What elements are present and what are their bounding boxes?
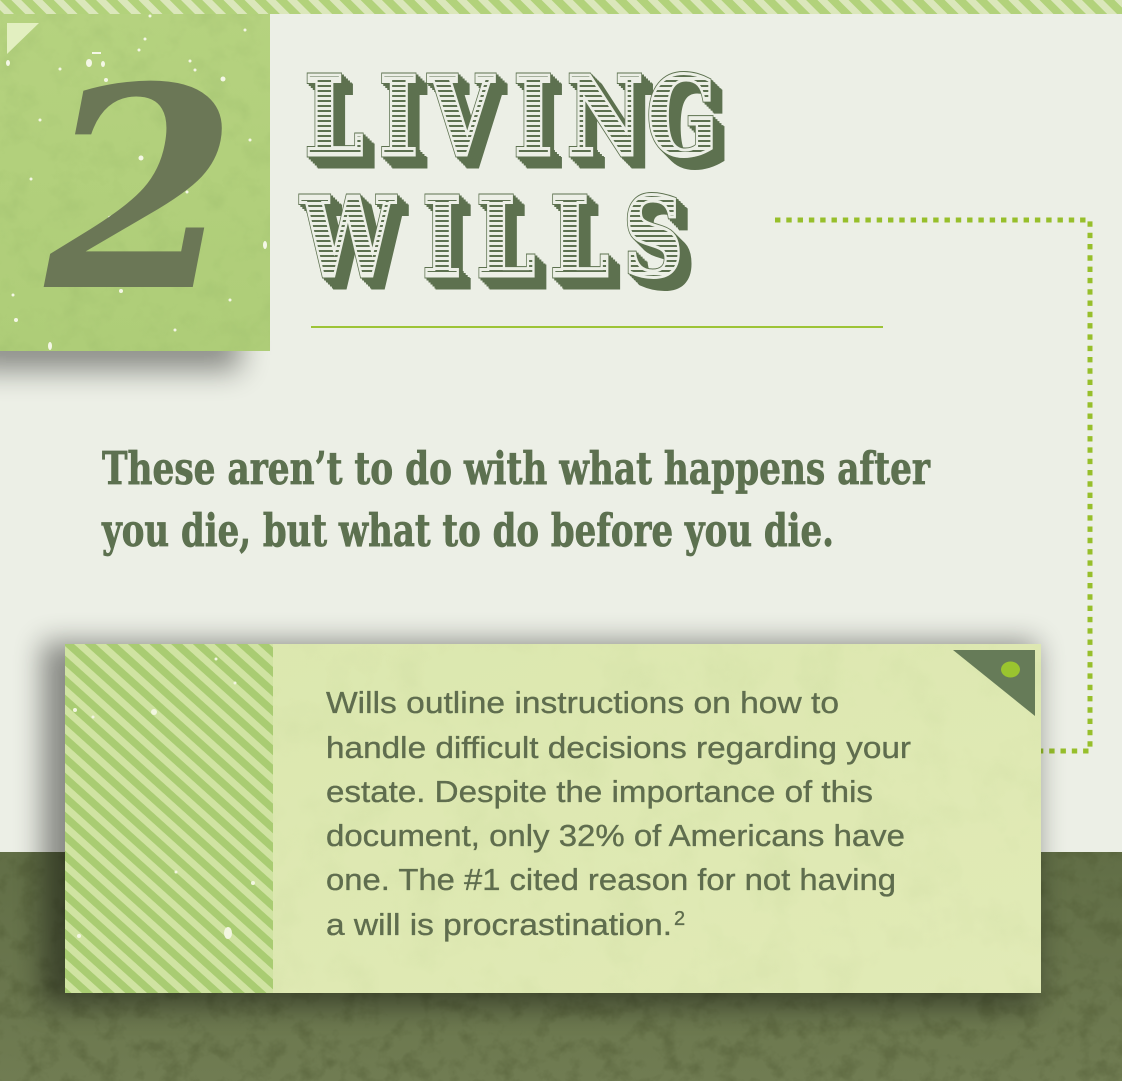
title: LIVING [305,53,718,182]
striped side strip [65,644,273,993]
title: WILLS [300,174,684,303]
body text: 2 [674,908,685,930]
body text: document, only 32% of Americans have [326,818,905,853]
panel: will explanation [42,642,1041,1006]
dotted connector line [775,220,1090,751]
title: LIVING [305,53,718,182]
dark footer band [0,852,1122,1081]
headline [101,442,931,557]
numeral 2: 2 [41,27,237,353]
specks on strip [73,658,255,939]
panel: number two [0,14,270,370]
body text: one. The #1 cited reason for not having [326,862,896,897]
body text [326,685,911,942]
title [300,53,718,303]
body text: handle difficult decisions regarding your [326,730,911,765]
headline: you die, but what to do before you die. [101,504,834,557]
body text: a will is procrastination. [326,907,672,942]
title underline [311,326,883,328]
corner triangle [7,23,39,54]
top striped border [0,0,1122,14]
specks [6,14,267,350]
title: WILLS [300,174,684,303]
corner triangle with dot [953,650,1035,716]
body text: Wills outline instructions on how to [326,685,839,720]
body text: estate. Despite the importance of this [326,774,873,809]
